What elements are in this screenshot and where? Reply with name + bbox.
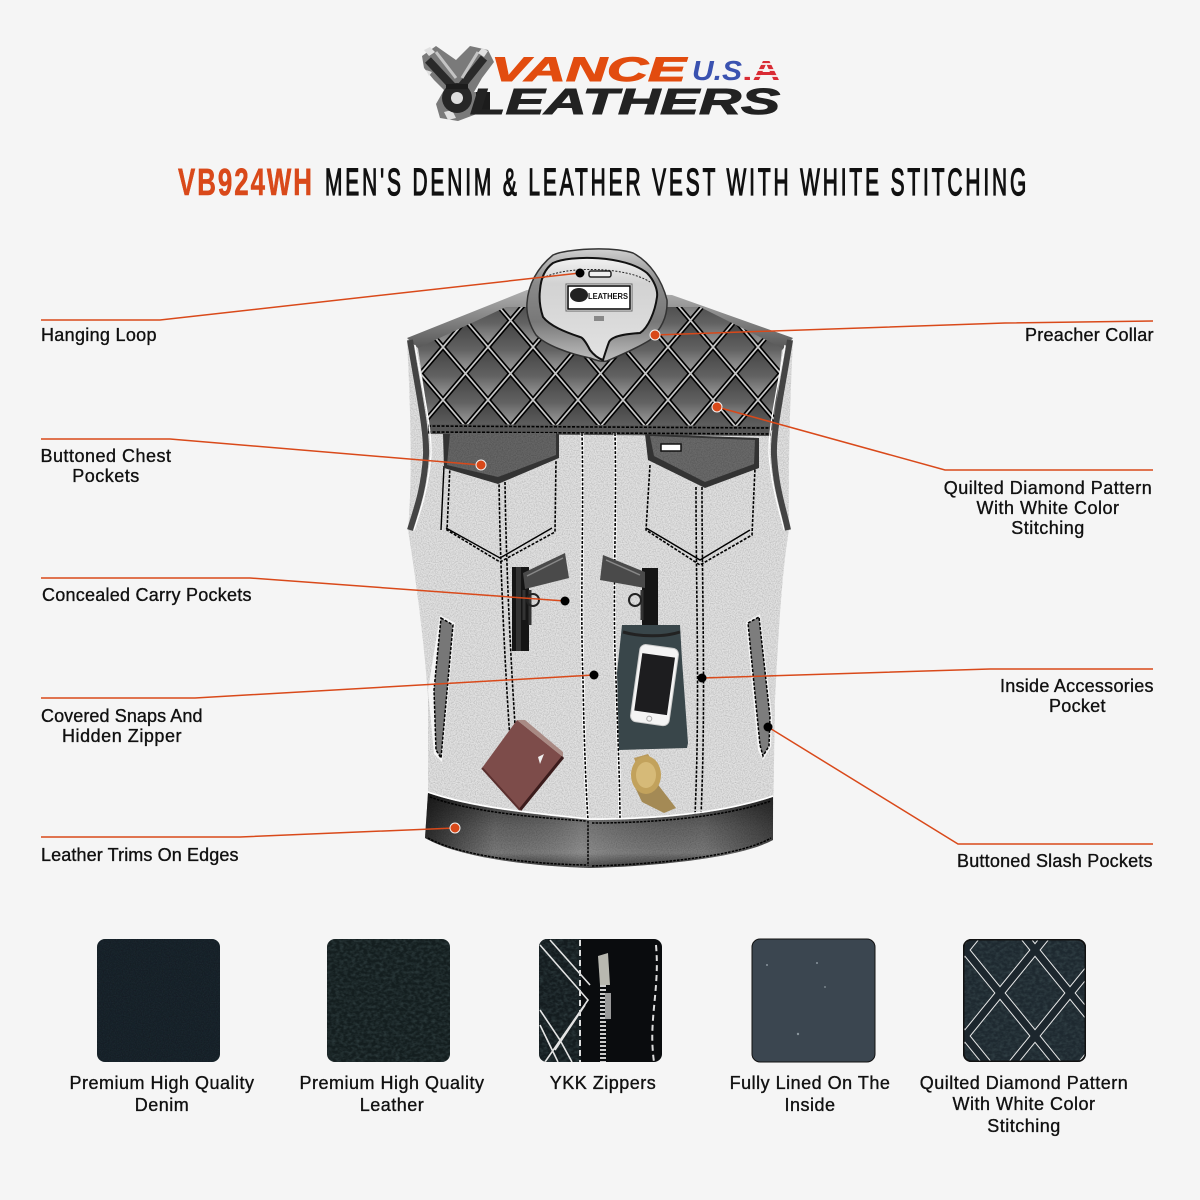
feature: premium denim: Denim (135, 1095, 189, 1115)
callout: concealed carry pockets: Concealed Carry Pockets (42, 585, 252, 605)
callout: quilted diamond pattern: With White Color (976, 498, 1120, 518)
callout: buttoned chest pockets: Pockets (72, 466, 140, 486)
feature: premium leather (299, 939, 485, 1115)
leather hem trim (425, 792, 773, 868)
callout: buttoned slash pockets: Buttoned Slash Pockets (957, 851, 1153, 871)
right slash pocket (746, 614, 772, 760)
neck label (566, 284, 632, 311)
feature: YKK zippers: YKK Zippers (550, 1073, 656, 1093)
icon: engine (422, 46, 494, 121)
left slash pocket (428, 615, 455, 762)
logo stripes letters: .A (742, 55, 780, 86)
neck label: LEATHERS (588, 292, 629, 301)
collar inner lining (540, 258, 657, 360)
callout: quilted diamond pattern: Stitching (1011, 518, 1085, 538)
feature: fully lined: Inside (784, 1095, 836, 1115)
logo: Vance Leathers USA (422, 46, 780, 122)
vest (407, 249, 793, 868)
armhole bindings (410, 340, 790, 530)
feature: quilted diamond pattern: Stitching (987, 1116, 1061, 1136)
callout: buttoned chest pockets (40, 439, 486, 486)
accessory: phone (630, 644, 679, 726)
shoulder strip (407, 290, 793, 350)
callout: buttoned slash pockets (764, 722, 1153, 871)
swatch: leather (327, 939, 450, 1062)
title: VB924WH (178, 161, 312, 203)
feature: quilted diamond pattern (920, 939, 1128, 1136)
accessory: left pistol (512, 553, 569, 651)
callout: covered snaps and hidden zipper (41, 670, 598, 746)
accessory: right pistol (600, 555, 658, 628)
logo word LEATHERS: LEATHERS (470, 81, 780, 122)
collar (527, 249, 667, 361)
callout: hanging loop: Hanging Loop (41, 325, 157, 345)
swatch: lining (752, 939, 875, 1062)
callout: quilted diamond pattern: Quilted Diamond Pattern (944, 478, 1152, 498)
front panel stitching (499, 480, 704, 815)
feature: premium denim (69, 939, 255, 1115)
callout: concealed carry pockets (41, 578, 570, 606)
swatch: quilted leather (963, 939, 1086, 1062)
quilted yoke (418, 307, 782, 432)
title: MEN'S DENIM & LEATHER VEST WITH WHITE STITCHING (325, 162, 1026, 204)
swatch: denim (97, 939, 220, 1062)
feature: fully lined (730, 939, 890, 1115)
placket stitching (582, 433, 620, 820)
size tag (594, 316, 604, 321)
collar stitch line (543, 269, 650, 282)
feature: fully lined: Fully Lined On The (730, 1073, 890, 1093)
callout: preacher collar: Preacher Collar (1025, 325, 1154, 345)
feature: premium denim: Premium High Quality (69, 1073, 255, 1093)
feature: premium leather: Leather (360, 1095, 424, 1115)
accessory: wallet (482, 720, 563, 810)
callout: inside accessories pocket: Pocket (1049, 696, 1106, 716)
callout: inside accessories pocket (698, 669, 1154, 716)
swatch: zipper (539, 939, 662, 1062)
callout: leather trims on edges (41, 823, 460, 865)
logo word VANCE: VANCE (491, 51, 688, 89)
feature: quilted diamond pattern: With White Color (952, 1094, 1096, 1114)
feature: premium leather: Premium High Quality (299, 1073, 485, 1093)
accessory: watch (631, 754, 676, 813)
right chest pocket (645, 434, 759, 565)
callout: leather trims on edges: Leather Trims On Edges (41, 845, 239, 865)
hanging loop (589, 271, 611, 277)
callout: hanging loop (41, 268, 584, 345)
left chest pocket (441, 433, 559, 562)
callout: preacher collar (650, 321, 1154, 345)
callout: covered snaps and hidden zipper: Covered Snaps And (41, 706, 203, 726)
accessory: inside pouch (617, 625, 688, 750)
feature: quilted diamond pattern: Quilted Diamond Pattern (920, 1073, 1128, 1093)
callout: covered snaps and hidden zipper: Hidden Zipper (62, 726, 182, 746)
callout: buttoned chest pockets: Buttoned Chest (40, 446, 172, 466)
vest body denim (407, 290, 793, 825)
logo word USA: U.S (692, 55, 742, 86)
yoke bottom band (428, 424, 771, 436)
callout: quilted diamond pattern (712, 402, 1153, 538)
callout: inside accessories pocket: Inside Accessories (1000, 676, 1154, 696)
feature: YKK zippers (539, 939, 662, 1093)
